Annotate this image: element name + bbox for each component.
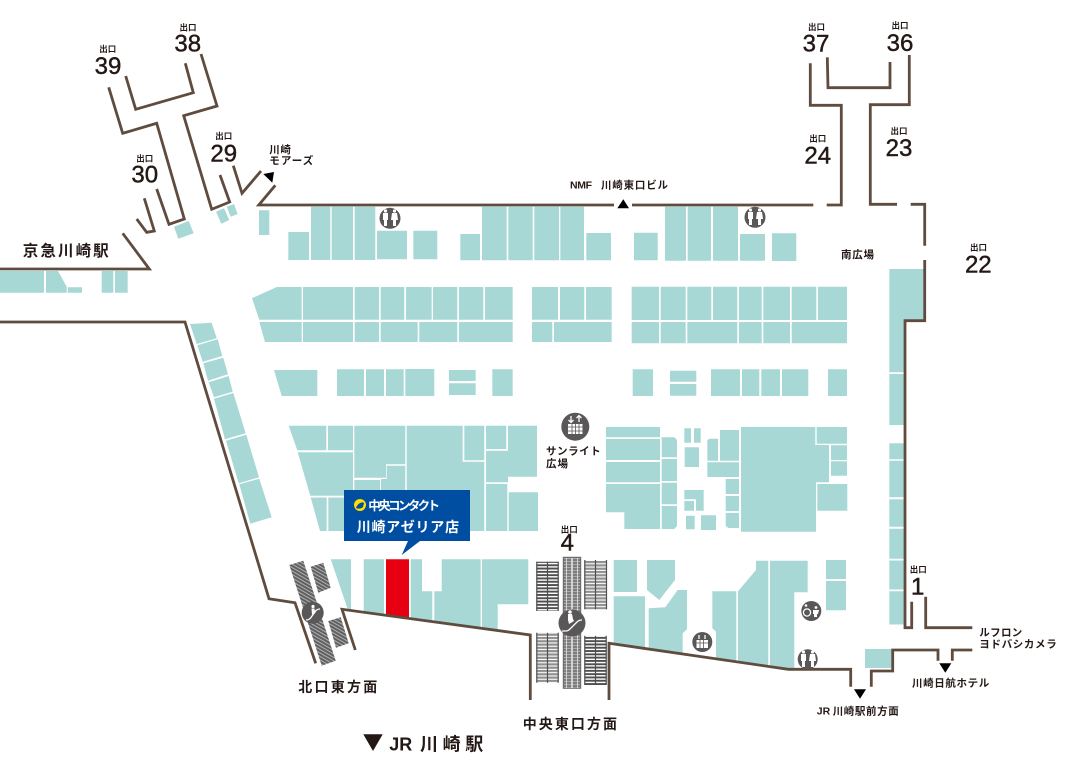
exit 23: 出口 [890, 126, 908, 136]
label: Kawasaki Nikko Hotel: 川崎日航ホテル [912, 677, 990, 690]
exit 39: 出口 [99, 44, 116, 54]
label: JR Kawasaki station: 川崎駅 [420, 734, 483, 754]
label: South plaza: 南広場 [841, 248, 874, 261]
exit 39: 39 [95, 53, 121, 80]
exit 38: 38 [174, 31, 201, 58]
exit 1: 出口 [910, 565, 927, 575]
shops: south row west [331, 559, 528, 630]
label: Keikyu Kawasaki station: 京急川崎駅 [23, 242, 109, 260]
exit 4 [561, 524, 578, 557]
exit 23: 23 [886, 135, 912, 162]
exit 36: 出口 [891, 20, 909, 30]
walls: northeast passages [632, 55, 925, 628]
label: JR Kawasaki station [389, 734, 483, 754]
shops: central block east [606, 427, 847, 532]
icon: elevator (Sunlight plaza) [561, 413, 589, 441]
arrow: to JR Kawasaki station [363, 734, 383, 751]
label: Sunlight plaza: サンライト [546, 446, 601, 458]
label: Sunlight plaza [546, 446, 601, 470]
arrow: to Kawasaki Mores [263, 172, 274, 183]
label: Kawasaki Mores: 川崎 [269, 143, 291, 156]
callout: Chuo Contact Kawasaki Azalea store [344, 490, 470, 555]
callout brand name: 中央コンタクト [368, 498, 440, 513]
shops: north row [288, 207, 796, 261]
exit 29: 29 [210, 140, 237, 167]
exit 24: 24 [804, 142, 831, 169]
exit 1: 1 [911, 573, 924, 600]
exit 37: 37 [803, 31, 829, 58]
exit 4: 出口 [561, 524, 578, 534]
arrow: to NMF building [617, 199, 629, 208]
label: JR Kawasaki station front direction: JR [817, 706, 831, 718]
label: Le Front Yodobashi Camera: ヨドバシカメラ [979, 638, 1057, 650]
shops: central block west [289, 426, 538, 531]
exit 24: 出口 [809, 134, 826, 144]
stairs: central east exit [536, 557, 607, 688]
exit 29: 出口 [215, 131, 232, 141]
label: JR Kawasaki station front direction: 川崎駅前方面 [833, 705, 899, 718]
label: Le Front Yodobashi Camera: ルフロン [979, 627, 1022, 639]
exit 37: 出口 [808, 22, 825, 32]
icon: restroom (north west) [380, 208, 400, 229]
walls: northwest passages [0, 54, 614, 269]
walls: southeast exits [609, 597, 972, 700]
shops: second row [252, 287, 847, 343]
label: NMF Kawasaki East Exit Building [570, 178, 668, 192]
label: north exit east direction: 北口東方面 [298, 679, 377, 695]
shops: east column [865, 269, 924, 668]
exit 4: 4 [561, 530, 574, 557]
exit 22: 出口 [970, 242, 987, 252]
shop: Chuo Contact Kawasaki Azalea (red highlight) [386, 559, 409, 619]
label: NMF Kawasaki East Exit Building: 川崎東口ビル [601, 178, 668, 192]
exit 1 [910, 565, 927, 600]
callout store name: 川崎アゼリア店 [357, 519, 459, 535]
escalators: north exit east (tilted) [289, 561, 349, 666]
label: Sunlight plaza: 広場 [546, 457, 568, 470]
icon: elevator (south) [692, 632, 712, 652]
shops: third row [274, 369, 847, 396]
label: Kawasaki Mores [269, 143, 314, 167]
shops: Keikyu station side [0, 204, 269, 293]
label: NMF Kawasaki East Exit Building: NMF [570, 180, 593, 192]
label: Kawasaki Mores: モアーズ [269, 154, 314, 167]
exit 30: 30 [131, 162, 158, 189]
walls: southwest and centre [0, 322, 530, 700]
label: Le Front Yodobashi Camera [979, 627, 1057, 650]
exit 36: 36 [887, 30, 913, 57]
icon: Chuo Contact logo [354, 499, 366, 511]
icon: escalator (north exit east) [302, 602, 324, 624]
label: JR Kawasaki station: JR [389, 734, 412, 754]
icon: accessible restroom [801, 601, 821, 621]
label: central east exit direction: 中央東口方面 [523, 716, 617, 732]
shops: west slanted column [190, 323, 272, 524]
exit 38: 出口 [179, 22, 197, 32]
arrow: to JR Kawasaki station front [854, 689, 866, 699]
icon: restroom (south east) [798, 649, 818, 669]
shops: south row east [614, 560, 846, 669]
icon: restroom (north east) [744, 207, 766, 228]
arrow: to Kawasaki Nikko Hotel [939, 663, 951, 673]
exit 22: 22 [965, 251, 992, 278]
exit 30: 出口 [136, 154, 153, 164]
icon: escalator (central east exit) [558, 610, 586, 636]
